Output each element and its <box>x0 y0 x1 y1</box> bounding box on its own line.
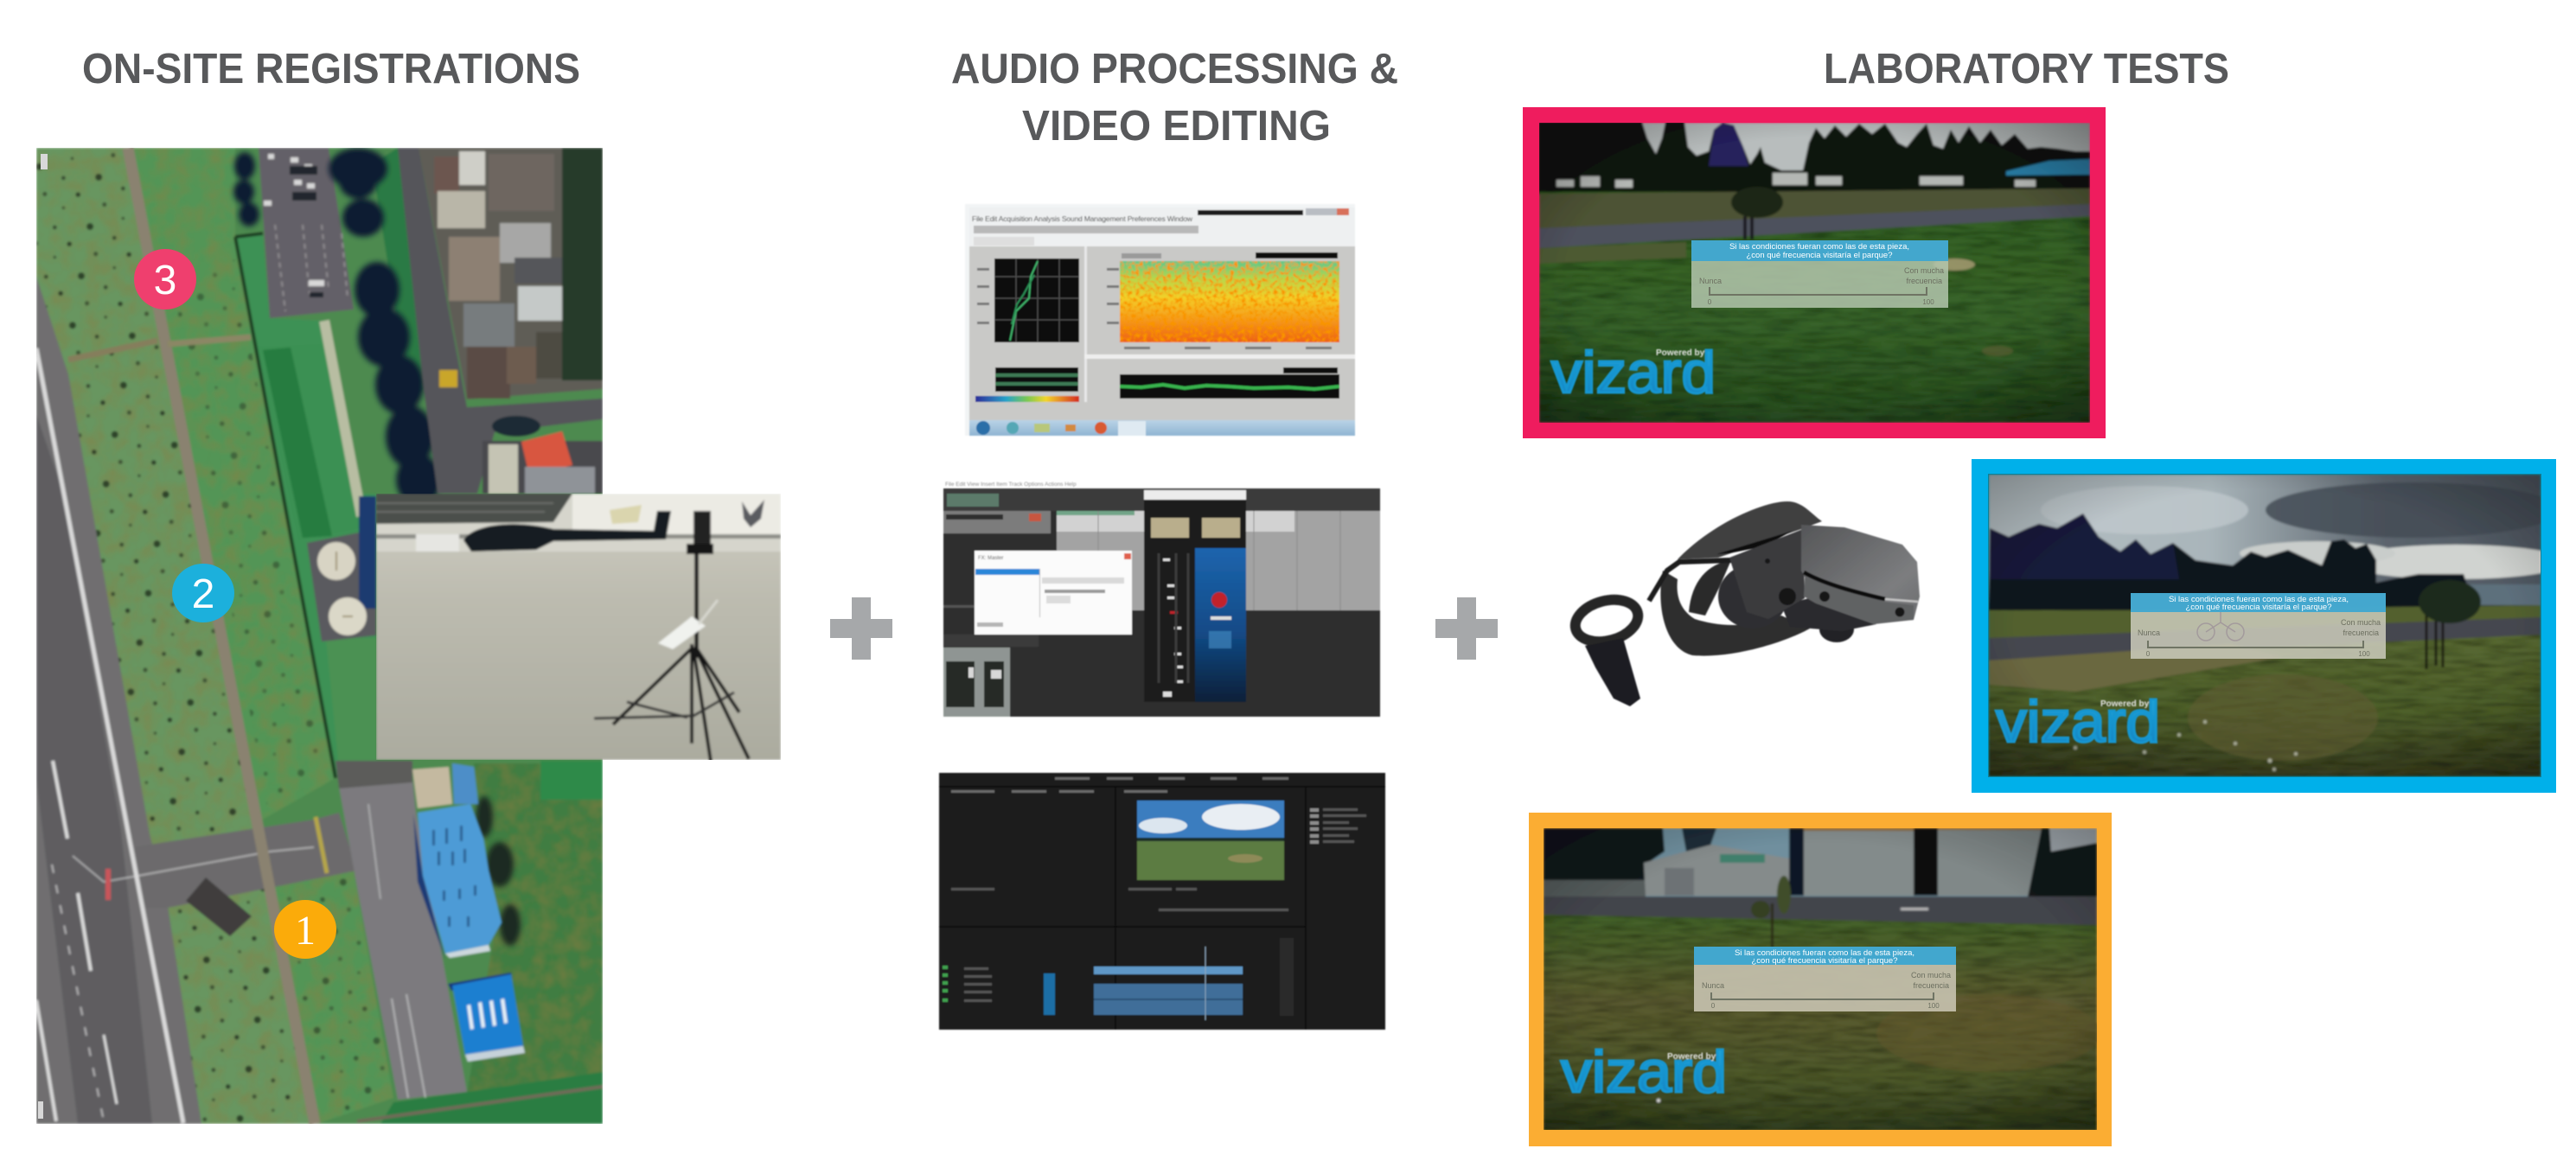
map corner marks <box>38 154 48 1119</box>
panel: aerial map of the site <box>36 148 603 1124</box>
street <box>398 148 603 494</box>
level history <box>1120 374 1339 399</box>
dark roof building <box>186 877 252 936</box>
strap adjusters <box>1649 559 1758 601</box>
grass strip east of the path <box>128 148 393 1124</box>
screenshot: audio workstation with plugin: File Edit View Insert Item Track Options Actions Help <box>945 482 1077 488</box>
trees <box>233 148 441 506</box>
spectrogram <box>1120 261 1339 342</box>
heading: on-site registrations: ON-SITE REGISTRATIONS <box>82 46 580 93</box>
preview frame <box>1137 801 1284 880</box>
fence line <box>235 237 336 778</box>
marker 1: 1 <box>295 908 316 954</box>
photo: measurement equipment in the hangar <box>376 494 781 762</box>
icon: VR headset and controller <box>1570 501 1920 706</box>
marker 1 <box>274 900 336 959</box>
mixer strips <box>943 648 1010 717</box>
icon: plus sign between first and second columns <box>830 597 892 660</box>
white dialog: FX: Master <box>978 556 1003 561</box>
helipads <box>307 496 376 641</box>
headset body <box>1781 597 1876 631</box>
white dialog <box>975 551 1132 635</box>
panel: orange framed VR scene <box>1529 813 2112 1146</box>
microphone on tripod <box>694 511 711 544</box>
meters <box>995 367 1078 392</box>
grass strip west of the path <box>36 148 315 1124</box>
light walkway <box>324 321 361 516</box>
headset visor <box>1801 525 1920 622</box>
question dialog: 100 <box>2358 650 2370 658</box>
panel: blue framed VR scene <box>1972 459 2568 793</box>
path <box>128 148 315 1124</box>
question dialog: 0 <box>1708 298 1712 306</box>
road <box>36 277 201 1124</box>
young tree <box>2419 580 2481 669</box>
question dialog: Con mucha <box>1904 266 1944 275</box>
question dialog: ¿con qué frecuencia visitaría el parque? <box>1747 251 1892 260</box>
houses with red roof <box>483 416 603 494</box>
icon: plus sign between second and third columns <box>1435 597 1498 660</box>
heading: audio processing and video editing <box>951 46 1398 150</box>
bright lawn <box>235 234 376 778</box>
effects list <box>1310 808 1366 844</box>
question dialog: Con mucha <box>2341 618 2381 627</box>
question dialog: 100 <box>1922 298 1934 306</box>
question dialog <box>2131 593 2386 659</box>
question dialog: 0 <box>1711 1002 1716 1010</box>
screenshot: audio workstation with plugin <box>943 482 1380 717</box>
blue hangars <box>412 763 525 1062</box>
timeline clips <box>1044 947 1243 1020</box>
menu bar: File Edit Acquisition Analysis Sound Management Preferences Window <box>972 214 1193 223</box>
vizard logo: vizard <box>1561 1039 1727 1105</box>
question dialog: Con mucha <box>1911 971 1951 979</box>
parking <box>259 148 354 318</box>
marker 2 <box>172 564 234 622</box>
compressor plugin <box>1144 490 1246 702</box>
colour scale <box>975 396 1079 402</box>
question dialog: frecuencia <box>1906 277 1942 285</box>
road markings <box>36 348 425 1123</box>
vizard logo: vizard <box>1996 689 2160 755</box>
vizard logo: vizard <box>1551 340 1716 405</box>
vizard logo: Powered by <box>1656 348 1705 358</box>
headset rear strap <box>1660 571 1810 656</box>
question dialog: 100 <box>1927 1002 1940 1010</box>
screenshot: acoustic analyser software <box>965 204 1355 436</box>
headset foot <box>1819 616 1854 642</box>
heading: laboratory tests: LABORATORY TESTS <box>1824 46 2229 93</box>
question dialog <box>1691 240 1948 308</box>
question dialog: Nunca <box>2138 628 2160 637</box>
track controls <box>943 494 1051 533</box>
question dialog: 0 <box>2146 650 2151 658</box>
panel: pink framed VR scene <box>1523 107 2106 438</box>
octave chart <box>994 258 1079 342</box>
question dialog: ¿con qué frecuencia visitaría el parque? <box>1752 956 1897 966</box>
question dialog: frecuencia <box>2343 628 2379 637</box>
middle strap <box>1689 560 1731 616</box>
vizard logo: Powered by <box>1667 1052 1716 1062</box>
young tree <box>1751 876 1791 948</box>
tree-lined green strip <box>373 148 422 398</box>
question dialog: Si las condiciones fueran como las de esta pieza, <box>1729 242 1909 252</box>
question dialog: frecuencia <box>1913 981 1949 990</box>
heading: audio processing and video editing: VIDEO EDITING <box>1022 103 1331 150</box>
question dialog: Nunca <box>1699 277 1722 285</box>
screenshot: video editor <box>939 773 1385 1030</box>
headset top strap <box>1678 501 1822 559</box>
project bin <box>943 966 948 1002</box>
marker 3: 3 <box>154 258 176 303</box>
young tree <box>1731 187 1783 239</box>
bicycle icon <box>2197 612 2244 641</box>
vizard logo: Powered by <box>2100 699 2150 709</box>
question dialog: Si las condiciones fueran como las de esta pieza, <box>1735 948 1914 958</box>
marker 3 <box>134 249 196 309</box>
helicopter <box>416 534 459 552</box>
question dialog: Si las condiciones fueran como las de esta pieza, <box>2169 595 2349 604</box>
taskbar <box>969 420 1355 436</box>
controller <box>1570 593 1643 706</box>
heading: audio processing and video editing: AUDIO PROCESSING & <box>951 46 1398 93</box>
marker 2: 2 <box>192 571 214 617</box>
lower right vegetation <box>468 763 603 1091</box>
question dialog: ¿con qué frecuencia visitaría el parque? <box>2186 603 2331 612</box>
buildings block <box>419 148 603 399</box>
question dialog <box>1694 947 1956 1011</box>
question dialog: Nunca <box>1702 981 1724 990</box>
